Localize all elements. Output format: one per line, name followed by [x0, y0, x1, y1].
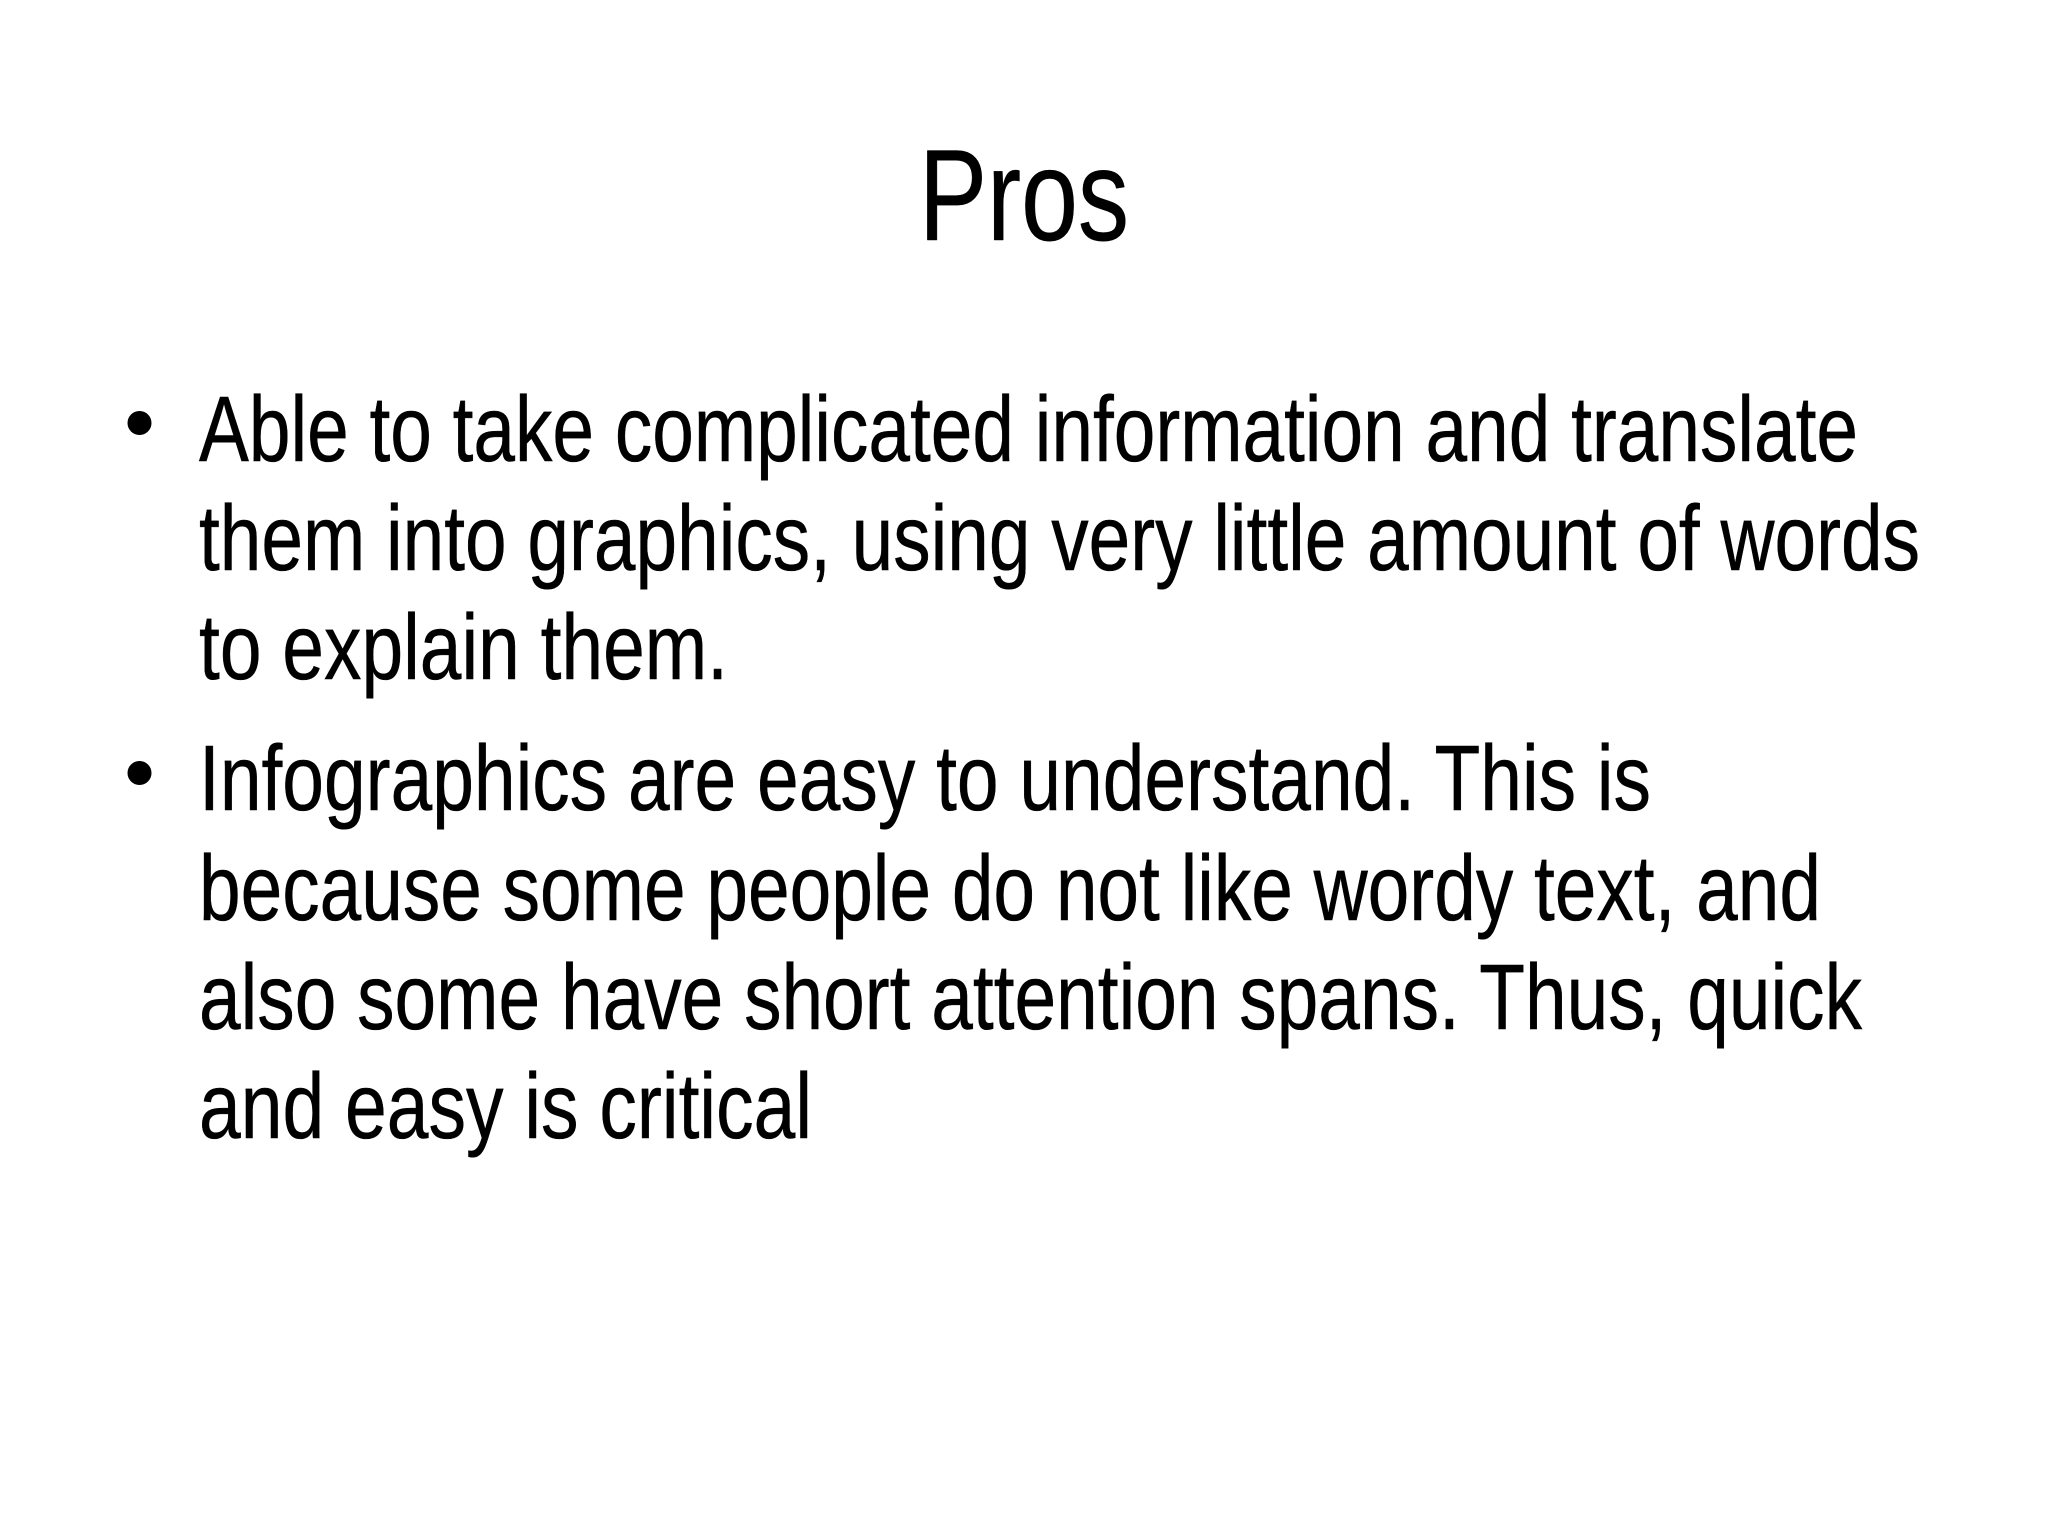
icon: bullet dot 2 [128, 761, 152, 785]
text block: bullet 1: to explain them. [199, 595, 728, 699]
bullet point 1 [128, 377, 1920, 699]
icon: bullet dot 1 [128, 411, 152, 435]
text block: bullet 1 [199, 377, 1920, 699]
text block: bullet 2: Infographics are easy to understand. This is [199, 726, 1651, 830]
text block: bullet 2: and easy is critical [199, 1054, 812, 1158]
text block: bullet 2 [199, 726, 1862, 1158]
title: Pros [919, 122, 1129, 268]
bullet point 2 [128, 726, 1862, 1158]
